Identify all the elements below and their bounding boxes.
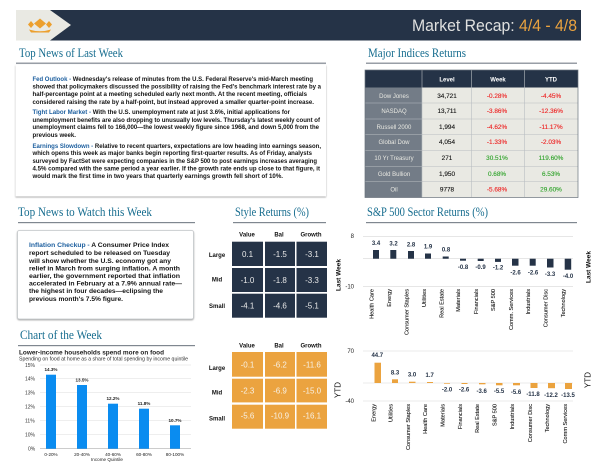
category labels: Materials (441, 404, 447, 427)
label: last week: Last Week (586, 251, 592, 283)
text: earnings slowdown: which opens this week as major banks begin reporting first-quarter results. As of Friday, analysts (32, 150, 313, 157)
row labels: Small (209, 416, 225, 422)
y axis labels: 15% (25, 363, 36, 369)
cell values: -1.8 (273, 276, 287, 285)
table values: 0.68% (488, 171, 506, 178)
y axis labels: 10% (25, 432, 36, 438)
table values: 1,950 (439, 171, 455, 178)
category labels: Energy (387, 289, 393, 307)
y axis labels: 12% (25, 404, 36, 410)
text: inflation checkup: accelerated in February at a 7.9% annual rate— (29, 280, 183, 287)
bar values: -2.0 (442, 388, 453, 394)
bar chart: sector returns last week (345, 234, 592, 335)
label: last week: Last Week (336, 259, 342, 291)
bar values: -2.6 (459, 388, 470, 394)
table values: 9778 (440, 186, 455, 194)
category labels (370, 289, 567, 335)
category labels: Technology (561, 289, 567, 317)
bar values: 8.3 (391, 370, 400, 376)
text: inflation checkup: relief in March from surging inflation. A month (29, 265, 180, 272)
bar values: 3.4 (372, 241, 381, 247)
table values: 119.60% (539, 155, 564, 162)
text: earnings slowdown: Earnings Slowdown - Relative to recent quarters, expectations are low heading into earnings season, (32, 143, 321, 150)
category labels: Real Estate (440, 289, 446, 318)
cell values: -3.1 (305, 250, 319, 259)
table header row: YTD (545, 78, 558, 84)
cell values: -15.0 (303, 386, 322, 396)
text: Fed outlook: half-percentage point at a meeting scheduled early next month. At the recent meeting, officials (32, 91, 308, 98)
bar values: -5.5 (494, 389, 505, 395)
bar values (44, 367, 182, 423)
table row labels: Russell 2000 (377, 125, 412, 131)
column headers: Growth (300, 344, 322, 350)
x axis labels: 60-80% (136, 452, 152, 457)
cell values: -10.9 (271, 412, 290, 420)
bar values: 0.8 (442, 248, 451, 254)
cell values: -0.1 (241, 360, 255, 370)
label: YTD: YTD (584, 372, 592, 388)
bar values: 11.8% (138, 401, 150, 406)
bar values: 13.5% (75, 378, 89, 382)
text: inflation checkup: earlier, the government reported that inflation (29, 273, 180, 280)
bar values: 1.9 (424, 244, 433, 250)
column headers (239, 232, 322, 238)
category labels: Comm Services (563, 404, 569, 443)
category labels: Consumer Disc (544, 289, 550, 327)
header title: Market Recap: 4/4 - 4/8 (412, 17, 577, 35)
text: earnings slowdown (32, 143, 321, 180)
table row labels: 10 Yr Treasury (374, 156, 414, 162)
bar values: -5.6 (511, 390, 522, 396)
bar values: -4.0 (563, 274, 574, 280)
table values: -1.33% (487, 139, 507, 146)
bars (46, 375, 180, 449)
category labels: Comm. Services (509, 289, 515, 330)
x axis labels: Income Quintile (91, 457, 123, 462)
table values: 1,994 (439, 124, 455, 131)
cell values: -5.6 (241, 412, 255, 420)
x axis labels (44, 452, 184, 462)
text: inflation checkup: will show whether the U.S. economy got any (28, 258, 172, 265)
bar values: -1.2 (493, 266, 504, 272)
table values: 29.60% (540, 186, 562, 194)
heading: style returns: Style Returns (%) (235, 205, 309, 219)
row labels: Large (209, 366, 226, 372)
bar values: 3.0 (408, 372, 417, 378)
table values: -11.17% (539, 124, 563, 131)
category labels: Health Care (423, 404, 429, 434)
row labels: Mid (212, 390, 222, 396)
table header row: Week (490, 78, 506, 84)
category labels: S&P 500 (493, 404, 499, 426)
bar values: -11.8 (526, 392, 540, 398)
text: Fed outlook: considered raising the rate by a half-point, but instead approved a smaller quarter-point increase. (32, 99, 314, 106)
column headers: Bal (274, 344, 284, 350)
bar values: -12.2 (544, 393, 558, 399)
category labels: Consumer Staples (406, 404, 412, 450)
bar values: -2.6 (510, 270, 521, 276)
cell values (241, 360, 322, 420)
text: tight labor market: Tight Labor Market - With the U.S. unemployment rate at just 3.6%, initial applications for (32, 109, 291, 116)
row labels: Large (209, 253, 226, 259)
table values: 6.53% (542, 171, 560, 178)
bar values: -0.8 (458, 265, 469, 271)
table values: -12.36% (539, 108, 563, 115)
text: Fed outlook: Fed Outlook - Wednesday's release of minutes from the U.S. Federal Reserve's mid-March meeting (32, 76, 313, 83)
text: Fed outlook: showed that policymakers discussed the possibility of raising the Fed's benchmark interest rate by a (32, 84, 322, 91)
heading: top news to watch: Top News to Watch this Week (18, 205, 153, 219)
logo tab (16, 10, 71, 40)
column headers: Value (239, 344, 255, 350)
heading: S&P 500 sector returns: S&P 500 Sector Returns (%) (367, 205, 488, 219)
column headers: Growth (300, 232, 322, 238)
category labels: Consumer Staples (405, 289, 411, 335)
cell values: -5.1 (305, 302, 319, 310)
x axis labels: 80-100% (166, 452, 184, 457)
text: tight labor market (32, 109, 321, 139)
category labels: Financials (474, 289, 480, 314)
row labels (209, 253, 226, 310)
bar values: -0.9 (475, 265, 486, 271)
table header row (439, 78, 558, 84)
bar chart: sector returns YTD (345, 349, 592, 450)
cell values: -11.6 (303, 360, 321, 370)
heading: chart of the week: Chart of the Week (20, 328, 103, 342)
cell values: -4.1 (241, 302, 255, 310)
y axis labels: 11% (25, 418, 35, 424)
cell values: -2.3 (241, 386, 255, 396)
column headers: Value (239, 232, 255, 238)
table values: 34,721 (437, 93, 457, 100)
chart title: Lower-income households spend more on food (19, 350, 164, 356)
panel: top news of last week (16, 65, 326, 196)
bars (373, 250, 571, 270)
category labels: S&P 500 (491, 289, 497, 311)
table row labels (374, 94, 414, 194)
heatmap: style returns YTD (209, 344, 342, 429)
category labels: Financials (458, 404, 464, 429)
bar values: -3.3 (545, 272, 556, 278)
text: tight labor market: previous week. (32, 132, 76, 139)
category labels: Consumer Disc (528, 404, 534, 442)
category labels: Industrials (510, 404, 516, 430)
text: inflation checkup: report scheduled to be released on Tuesday (29, 250, 171, 257)
category labels: Utilities (422, 289, 428, 307)
bar values (371, 353, 575, 399)
table values: 271 (442, 155, 453, 162)
panel: inflation checkup (18, 230, 194, 319)
text: inflation checkup (28, 242, 183, 303)
chart subtitle: Spending on food at home as a share of total spending by income quintile (19, 356, 188, 362)
text: tight labor market: unemployment claims fell to 166,000—the lowest weekly figure since 1968, and down 5,000 from the (32, 124, 320, 131)
table values: -4.62% (487, 124, 507, 131)
text: earnings slowdown: 4.5% compared with the same period a year earlier. If the growth rate ends up close to that figure, it (32, 165, 320, 172)
table values: -4.45% (541, 93, 561, 100)
heading: top news of last week: Top News of Last Week (19, 46, 124, 60)
cell values: -6.9 (273, 386, 287, 396)
x axis labels: 40-60% (105, 452, 121, 457)
bar values: 2.8 (407, 242, 416, 248)
y axis labels: 70 (347, 349, 355, 355)
table values: -0.28% (487, 93, 507, 100)
y axis labels (25, 363, 36, 452)
cell values: -6.2 (273, 360, 287, 370)
table: major indices returns (365, 70, 578, 198)
x axis labels: 0-20% (44, 452, 58, 457)
bar values: 12.2% (106, 396, 120, 401)
table values: -5.68% (487, 186, 507, 194)
y axis labels: 14% (25, 376, 36, 382)
category labels (371, 404, 569, 450)
table row labels: Oil (390, 188, 398, 194)
header banner (16, 10, 581, 40)
y axis labels: 13% (25, 390, 36, 396)
bar values: -3.6 (477, 389, 488, 395)
table row labels: NASDAQ (381, 109, 407, 115)
category labels: Technology (545, 404, 551, 432)
bars (374, 363, 572, 389)
column headers (239, 344, 322, 350)
x axis labels: 20-40% (74, 452, 90, 457)
bar values: 10.7% (168, 418, 182, 423)
table header row: Level (439, 78, 455, 84)
label: YTD: YTD (334, 382, 342, 398)
bar values (372, 241, 574, 280)
table row labels: Dow Jones (379, 94, 409, 100)
table row labels: Global Dow (378, 140, 410, 146)
text: earnings slowdown: surveyed by FactSet were expecting companies in the S&P 500 to post earnings increases averaging (32, 158, 317, 165)
y axis labels (345, 234, 355, 291)
cell values: -3.3 (305, 276, 319, 285)
bar values: -2.6 (528, 270, 539, 276)
bar chart: food spending by income quintile (19, 350, 191, 462)
category labels: Industrials (526, 289, 532, 314)
table values: -2.03% (541, 139, 561, 146)
table values: 30.51% (486, 155, 508, 162)
text: inflation checkup: Inflation Checkup - A Consumer Price Index (29, 242, 170, 249)
row labels: Small (209, 304, 225, 310)
cell values: -4.6 (273, 302, 287, 310)
text: tight labor market: unemployment benefits are also dropping to unusually low levels. Thursday's latest weekly count of (32, 117, 321, 124)
cell values (241, 250, 319, 310)
text: inflation checkup: previous month's 7.5% figure. (29, 296, 123, 303)
category labels: Utilities (389, 404, 395, 422)
category labels: Materials (456, 289, 462, 312)
cell values: -16.1 (303, 412, 322, 420)
y axis labels: -40 (345, 399, 355, 405)
text: earnings slowdown: would mark the first time in two years that quarterly earnings growth fell short of 10%. (32, 173, 283, 180)
cell values: -1.5 (273, 250, 287, 259)
text: Fed outlook (32, 76, 322, 106)
bar values: 1.7 (426, 373, 435, 379)
column headers: Bal (274, 232, 284, 238)
heatmap: style returns last week (209, 232, 342, 318)
table row labels: Gold Bullion (378, 172, 410, 178)
table values: 13,711 (437, 108, 457, 115)
table values (437, 93, 564, 194)
y axis labels: -10 (345, 285, 355, 291)
y axis labels: 0% (28, 446, 36, 452)
heading: major indices returns: Major Indices Returns (368, 46, 466, 60)
category labels: Energy (371, 404, 377, 422)
table values: 4,054 (439, 139, 455, 146)
cell values: 0.1 (242, 250, 254, 259)
row labels (209, 366, 226, 422)
cell values: -1.0 (241, 276, 255, 285)
bar values: 44.7 (371, 353, 384, 359)
category labels: Health Care (370, 289, 376, 319)
y axis labels (345, 349, 355, 405)
bar values: -13.5 (561, 393, 575, 399)
text: inflation checkup: the highest in four decades—eclipsing the (29, 288, 164, 295)
table values: -3.86% (487, 108, 507, 115)
category labels: Real Estate (475, 404, 481, 433)
bar values: 14.3% (44, 367, 58, 372)
y axis labels: 8 (351, 234, 355, 240)
bar values: 3.2 (389, 242, 398, 248)
row labels: Mid (212, 278, 222, 284)
